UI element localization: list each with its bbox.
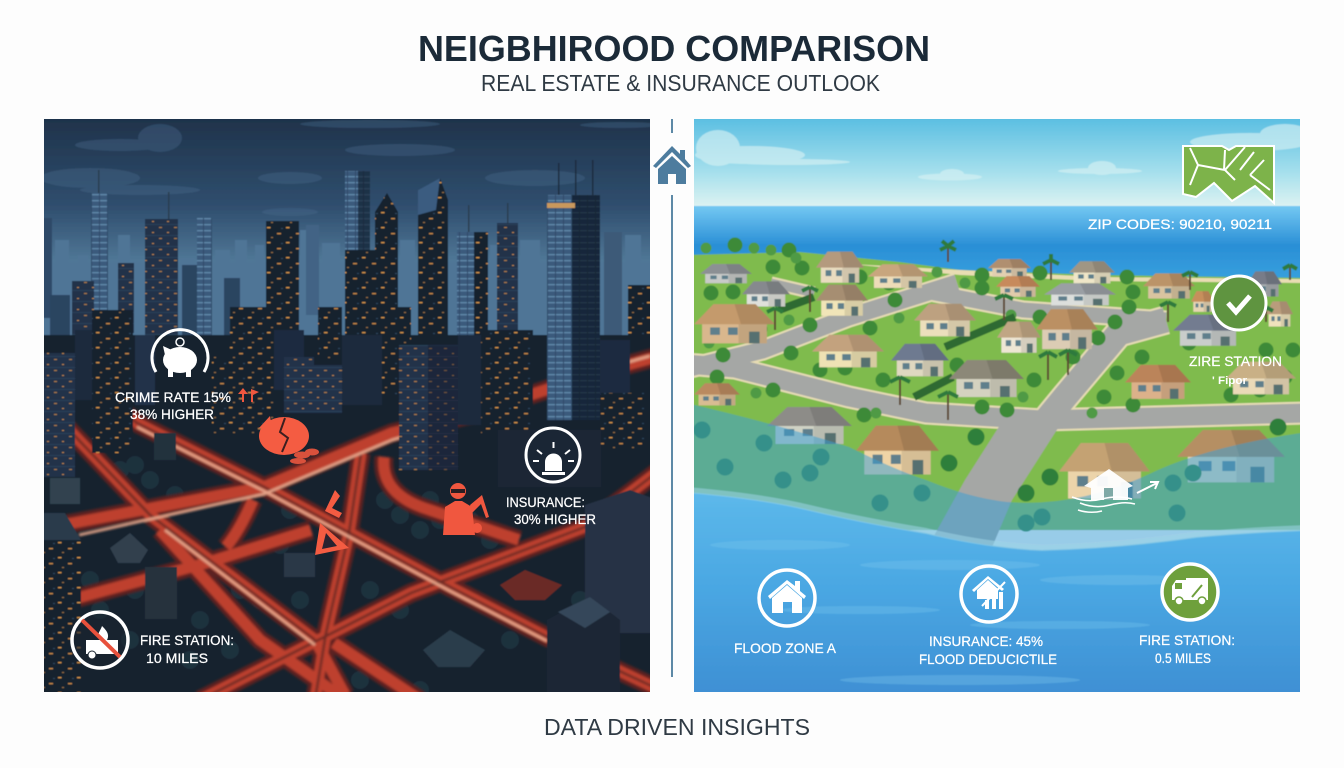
clouds [40, 120, 660, 216]
icon: no fire station badge [72, 612, 128, 668]
text: fire station near: ZIRE STATION [1189, 353, 1282, 369]
flood water [686, 492, 1308, 700]
icon: alarm siren badge [526, 428, 580, 482]
text: zip codes: ZIP CODES: 90210, 90211 [1088, 216, 1272, 232]
text: insurance: 30% HIGHER [514, 511, 596, 527]
text: fire station near [1189, 356, 1281, 386]
text: insurance deductible [919, 633, 1057, 667]
icon: burglar [443, 483, 489, 535]
text: insurance deductible: INSURANCE: 45% [929, 633, 1043, 649]
icon: check badge [1212, 276, 1266, 330]
tree clusters [90, 465, 580, 690]
text: fire station close [1139, 632, 1235, 666]
roads [686, 283, 1308, 425]
icon: flood zone house badge [759, 570, 815, 626]
text: crime rate: CRIME RATE 15% [115, 389, 231, 405]
land [686, 252, 1308, 530]
subtitle: REAL ESTATE & INSURANCE OUTLOOK [481, 70, 881, 96]
text: fire station near: ' Fipor [1212, 375, 1248, 387]
text: crime rate [115, 388, 259, 422]
flood zone overlay [686, 403, 1308, 560]
text: fire station distance: FIRE STATION: [140, 632, 234, 648]
text: fire station close: 0.5 MILES [1155, 650, 1211, 666]
foreground towers [36, 160, 658, 700]
icon: warning sign and tools [315, 490, 349, 555]
palm trees [767, 241, 1297, 420]
far skyline [44, 230, 650, 336]
title: NEIGBHIROOD COMPARISON [418, 28, 930, 69]
icon: house [653, 146, 691, 184]
trees [711, 245, 1293, 415]
clouds [695, 124, 1310, 180]
text: flood zone: FLOOD ZONE A [734, 640, 837, 656]
text: fire station distance: 10 MILES [146, 650, 208, 666]
low buildings [110, 433, 562, 667]
water ripples [710, 540, 1200, 685]
icon: insurance house chart badge [961, 566, 1017, 622]
panel: urban neighborhood at night [36, 111, 660, 710]
suburb scene [686, 111, 1310, 700]
houses [694, 252, 1296, 498]
panel: coastal suburb [686, 111, 1310, 700]
icon: flooded house with arrow [1072, 469, 1158, 512]
icon: broken piggy bank [259, 416, 319, 464]
text: fire station close: FIRE STATION: [1139, 632, 1235, 648]
text: crime rate: 38% HIGHER [130, 406, 214, 422]
roads with light trails [36, 356, 660, 710]
text: insurance deductible: FLOOD DEDUCICTILE [919, 651, 1057, 667]
text: insurance [507, 497, 596, 524]
sea [694, 206, 1300, 279]
icon: zip code map [1183, 146, 1274, 203]
text: insurance: INSURANCE: [506, 494, 585, 510]
text: fire station distance [140, 635, 233, 664]
ground [36, 335, 658, 700]
icon: piggy bank badge [152, 330, 208, 377]
city scene [36, 111, 660, 710]
trees in flood area [702, 427, 1278, 523]
icon: fire truck badge [1162, 564, 1218, 620]
mid skyline towers [44, 170, 650, 336]
footer: DATA DRIVEN INSIGHTS [544, 714, 810, 740]
divider with house icon [653, 119, 691, 677]
